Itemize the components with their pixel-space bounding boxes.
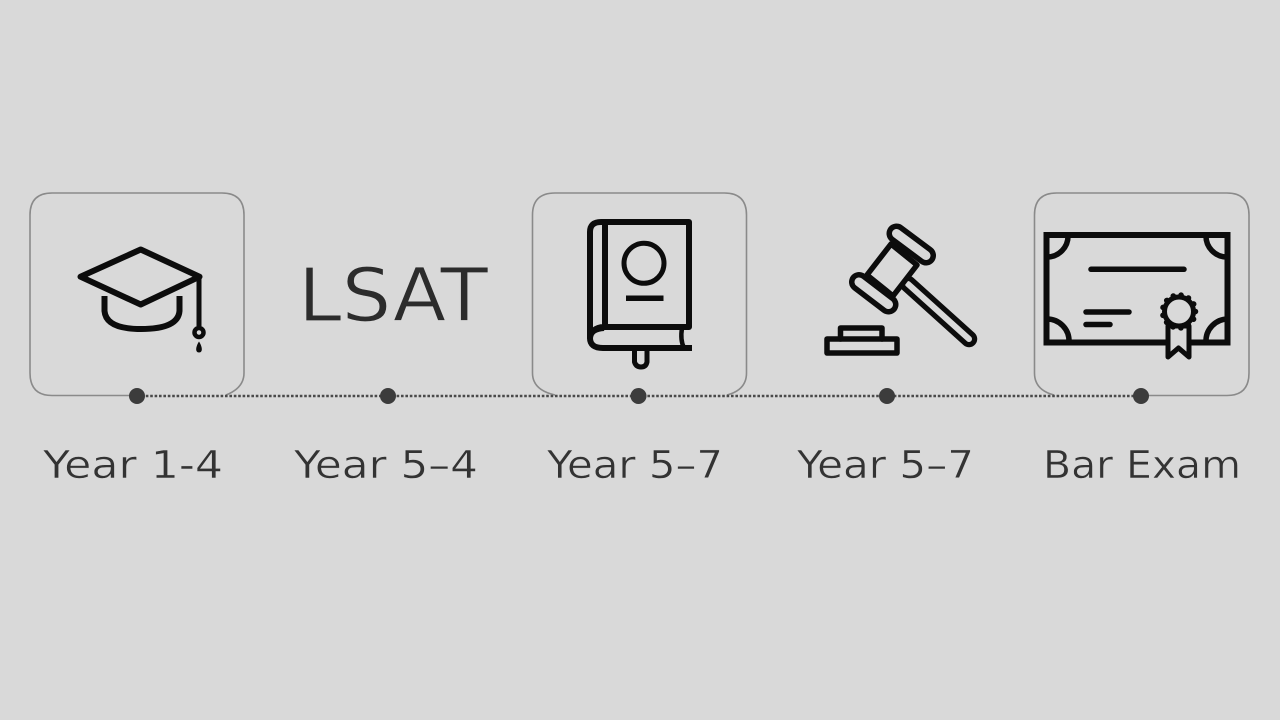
icon: book bbox=[590, 222, 692, 367]
label: step 3: Year 5–7 bbox=[546, 443, 723, 487]
timeline dotted connector bbox=[137, 395, 1141, 397]
icon: graduation cap bbox=[80, 250, 204, 352]
ribbon bbox=[1168, 326, 1189, 357]
timeline dot: step 2 bbox=[380, 388, 396, 404]
label: step 1: Year 1-4 bbox=[42, 443, 223, 487]
sound block bbox=[827, 328, 897, 353]
timeline dot: step 3 bbox=[630, 388, 646, 404]
timeline dot: step 4 bbox=[879, 388, 895, 404]
gavel head bbox=[859, 234, 926, 304]
gavel handle bbox=[908, 284, 969, 339]
icon: diploma certificate bbox=[1046, 235, 1228, 357]
rosette seal bbox=[1162, 295, 1196, 328]
card outline: step 5 bbox=[1034, 193, 1249, 396]
label: step 2: Year 5–4 bbox=[293, 443, 478, 487]
timeline dot: step 5 bbox=[1133, 388, 1149, 404]
label: step 5: Bar Exam bbox=[1043, 443, 1241, 487]
LSAT heading: LSAT bbox=[298, 253, 489, 339]
icon: gavel bbox=[827, 234, 969, 353]
card outline: step 3 bbox=[532, 193, 746, 395]
timeline dot: step 1 bbox=[129, 388, 145, 404]
label: step 4: Year 5–7 bbox=[796, 443, 974, 487]
card outline: step 1 bbox=[30, 193, 244, 396]
